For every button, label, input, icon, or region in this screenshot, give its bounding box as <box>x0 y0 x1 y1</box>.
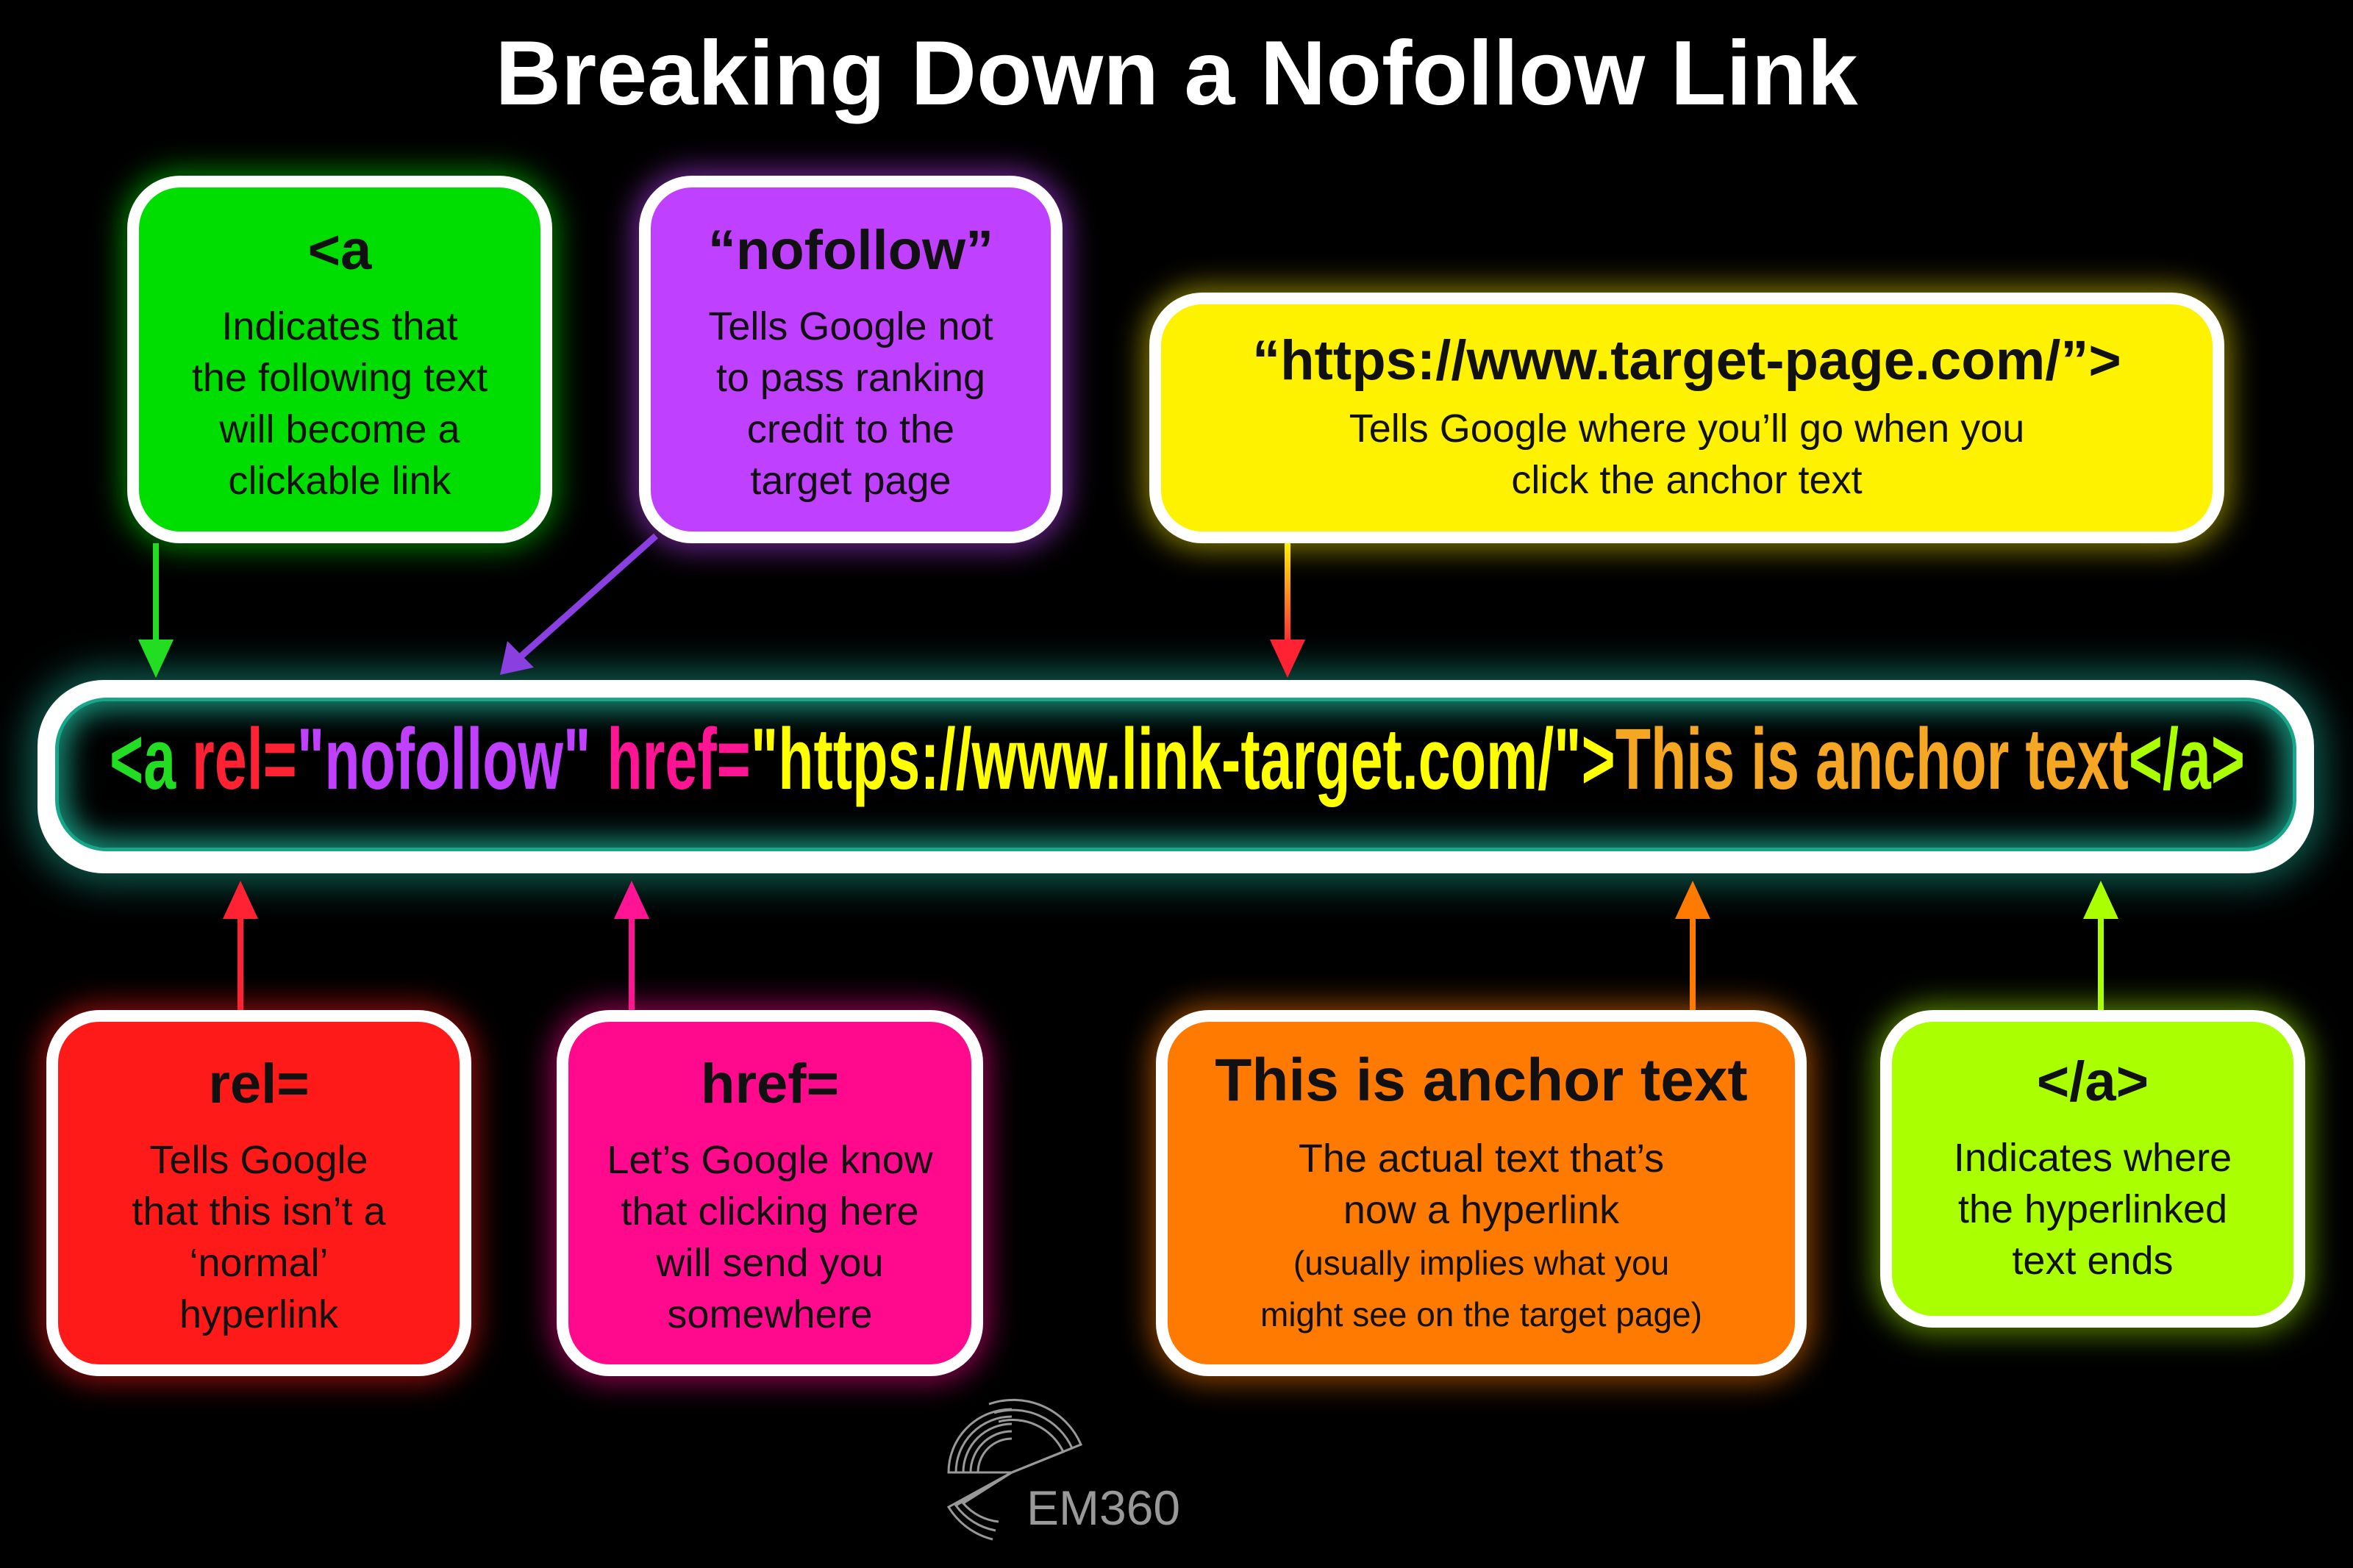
arrow: purple diagonal <box>500 536 656 675</box>
text: anchor description <box>1260 1136 1702 1333</box>
text: rel description: hyperlink <box>179 1292 338 1336</box>
arrow: red up <box>223 881 258 1010</box>
code text: <a rel="nofollow" href="https://www.link-target.com/">This is anchor text</a> <box>110 711 2245 808</box>
text: href description: that clicking here <box>621 1189 919 1234</box>
text: anchor description: might see on the target page) <box>1260 1295 1702 1333</box>
panel: anchor text <box>1156 1010 1807 1376</box>
arrow: green down <box>138 543 174 678</box>
panel: <a <box>127 176 552 543</box>
text: nofollow description: credit to the <box>747 407 954 451</box>
text: </a> description: text ends <box>2012 1239 2174 1283</box>
text: nofollow description: Tells Google not <box>708 304 993 348</box>
text: rel description: ‘normal’ <box>189 1241 329 1285</box>
text: <a description <box>192 304 488 503</box>
text: rel description <box>132 1138 386 1336</box>
text: anchor description: The actual text that’s <box>1299 1136 1664 1181</box>
arrow: lime up <box>2083 881 2118 1010</box>
text: url description: click the anchor text <box>1511 458 1863 502</box>
panel: rel= <box>46 1010 471 1376</box>
heading: </a>: </a> <box>2037 1050 2149 1113</box>
text: nofollow description: to pass ranking <box>716 356 985 400</box>
text: </a> description: Indicates where <box>1954 1136 2232 1180</box>
text: <a description: the following text <box>192 356 488 400</box>
text: href description: will send you <box>656 1241 884 1285</box>
text: anchor description: now a hyperlink <box>1343 1188 1619 1232</box>
text: <a description: clickable link <box>228 459 451 503</box>
text: url description <box>1349 407 2024 502</box>
text: rel description: that this isn’t a <box>132 1189 386 1234</box>
text: rel description: Tells Google <box>149 1138 368 1182</box>
arrow: orange up <box>1675 881 1710 1010</box>
panel: url <box>1149 293 2224 543</box>
text: nofollow description <box>708 304 993 503</box>
logo: EM360: EM360 <box>1026 1481 1180 1535</box>
code bar <box>38 680 2314 873</box>
title: Breaking Down a Nofollow Link <box>495 23 1858 124</box>
heading: rel=: rel= <box>208 1053 310 1115</box>
arrow: yellow down <box>1270 543 1305 678</box>
text: href description: somewhere <box>667 1292 873 1336</box>
text: <a description: Indicates that <box>221 304 458 348</box>
heading: <a: <a <box>308 219 371 282</box>
panel: href= <box>557 1010 983 1376</box>
heading: nofollow: “nofollow” <box>708 219 993 282</box>
text: <a description: will become a <box>219 407 460 451</box>
text: href description: Let’s Google know <box>607 1138 933 1182</box>
panel: </a> <box>1880 1010 2305 1328</box>
text: </a> description <box>1954 1136 2232 1283</box>
text: url description: Tells Google where you’ll go when you <box>1349 407 2024 451</box>
text: href description <box>607 1138 933 1336</box>
logo: EM360 <box>949 1400 1180 1539</box>
heading: anchor text: This is anchor text <box>1215 1047 1748 1114</box>
heading: href=: href= <box>701 1053 839 1115</box>
panel: nofollow <box>639 176 1063 543</box>
text: anchor description: (usually implies what you <box>1293 1244 1669 1282</box>
text: nofollow description: target page <box>750 459 951 503</box>
text: </a> description: the hyperlinked <box>1958 1187 2227 1231</box>
heading: url: “https://www.target-page.com/”> <box>1252 329 2121 392</box>
arrow: pink up <box>614 881 649 1010</box>
